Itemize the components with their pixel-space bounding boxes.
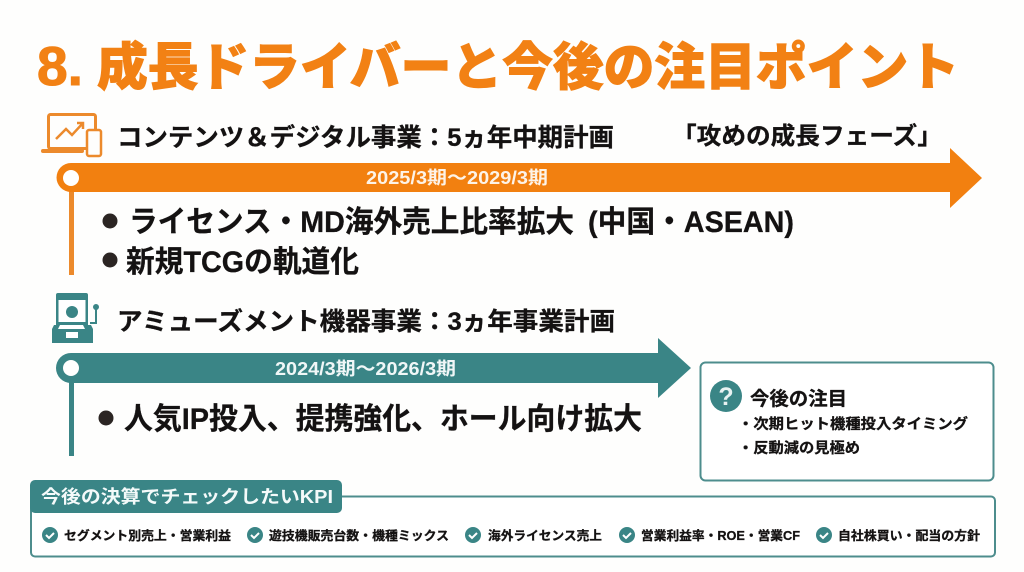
phase label: 「攻めの成長フェーズ」 — [672, 122, 942, 150]
bullet: overseas license — [102, 206, 794, 239]
period label: 2024/3期〜2026/3期 — [275, 359, 456, 379]
KPI header: 今後の決算でチェックしたいKPI — [41, 486, 333, 507]
bullet: new TCG: 新規TCGの軌道化 — [126, 246, 359, 279]
timeline start marker — [63, 170, 79, 186]
KPI item: shareholder returns: 自社株買い・配当の方針 — [838, 528, 981, 543]
KPI item: margin and ROE: 営業利益率・ROE・営業CF — [641, 528, 800, 543]
icon: question mark — [710, 380, 742, 412]
title: 8. — [37, 35, 83, 97]
heading: future focus: 今後の注目 — [750, 388, 847, 410]
arrow: orange timeline — [57, 148, 982, 208]
heading: content and digital business: コンテンツ＆デジタル事業：5ヵ年中期計画 — [117, 123, 614, 152]
KPI item: machine sales: 遊技機販売台数・機種ミックス — [269, 528, 449, 543]
arrow: teal timeline — [56, 338, 691, 398]
bullet: overseas license: (中国・ASEAN) — [588, 206, 794, 239]
KPI header — [30, 480, 342, 513]
panel: future focus — [700, 362, 994, 480]
KPI item: segment sales: セグメント別売上・営業利益 — [64, 528, 231, 543]
bullet: popular IP: 人気IP投入、提携強化、ホール向け拡大 — [124, 403, 642, 436]
icon: laptop and phone — [41, 114, 101, 156]
timeline start marker — [63, 360, 79, 376]
bullet: overseas license: ライセンス・MD海外売上比率拡大 — [129, 206, 574, 239]
timeline stem: orange — [69, 188, 74, 275]
period label: 2025/3期〜2029/3期 — [366, 168, 548, 188]
heading: amusement machines business: アミューズメント機器事業：3ヵ年事業計画 — [117, 307, 615, 336]
panel: amusement machines business — [52, 293, 691, 456]
panel: content and digital business — [41, 114, 982, 279]
icon: question mark: ? — [718, 383, 734, 411]
list: future focus items — [738, 415, 969, 457]
list: future focus items: ・次期ヒット機種投入タイミング — [738, 415, 969, 433]
title: 成長ドライバーと今後の注目ポイント — [97, 39, 959, 96]
KPI item: overseas license sales: 海外ライセンス売上 — [488, 528, 602, 543]
list: future focus items: ・反動減の見極め — [738, 440, 860, 457]
panel: KPI — [30, 480, 995, 556]
timeline stem: teal — [69, 380, 74, 456]
icon: slot machine — [52, 293, 99, 343]
